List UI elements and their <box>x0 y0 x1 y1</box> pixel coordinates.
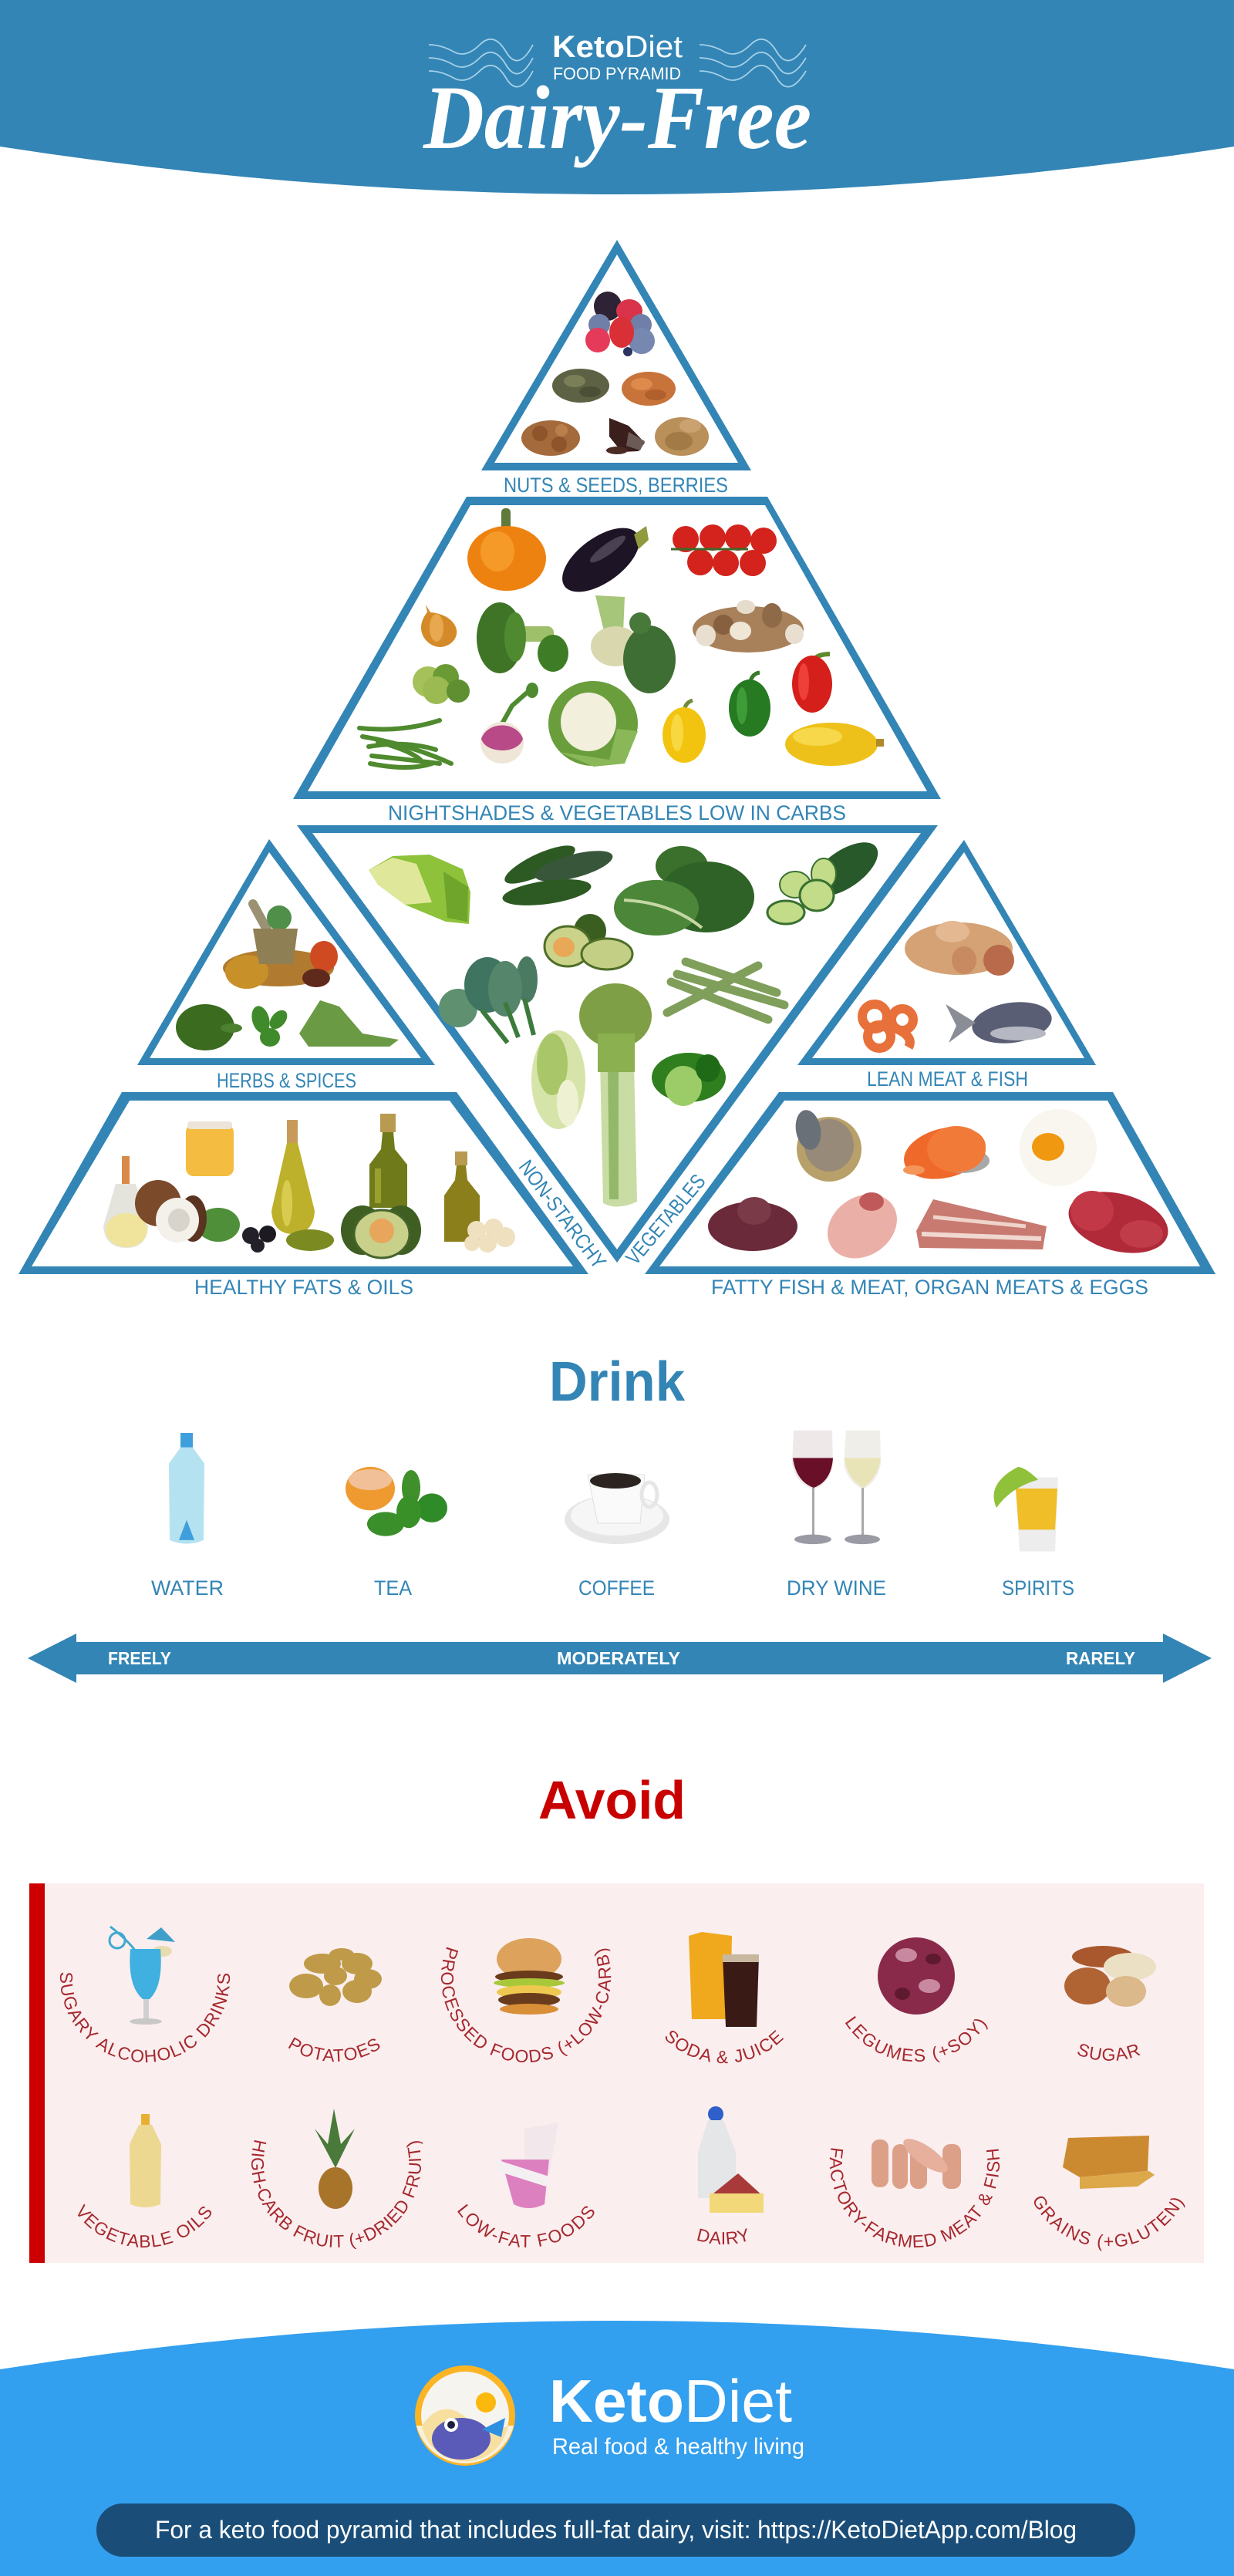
icon: pumpkin seeds <box>552 369 609 403</box>
icon: beef steak <box>1062 1182 1175 1263</box>
icon: toast <box>1063 2136 1155 2189</box>
icon: dark chocolate <box>606 418 645 454</box>
icon: avocado <box>545 914 632 969</box>
brand wordmark: KetoDiet <box>549 2367 792 2435</box>
icon: red pepper <box>792 654 832 713</box>
label: high-carb fruit: HIGH-CARB FRUIT (+DRIED FRUIT) <box>251 2139 423 2249</box>
icon: green beans <box>359 720 451 767</box>
icon: macadamia nuts <box>464 1219 515 1253</box>
icon: pork belly <box>916 1199 1047 1249</box>
icon: shrimp <box>862 1004 913 1048</box>
label: sugar: SUGAR <box>1077 2044 1141 2061</box>
icon: parsley <box>176 1004 242 1050</box>
label: potatoes: POTATOES <box>288 2038 379 2062</box>
icon: sausages <box>872 2133 961 2189</box>
label: non-starchy: NON-STARCHY <box>514 1155 611 1273</box>
subtitle: FOOD PYRAMID <box>553 64 681 83</box>
wave decoration right <box>700 39 806 87</box>
icon: basil <box>249 1004 291 1047</box>
label: tea: TEA <box>374 1576 412 1600</box>
icon: soda and juice <box>689 1932 759 2027</box>
label: nightshades: NIGHTSHADES & VEGETABLES LOW IN CARBS <box>388 801 846 824</box>
icon: pumpkin <box>467 508 546 591</box>
heading: Avoid: Avoid <box>538 1770 686 1830</box>
brand wordmark: KetoDiet <box>552 30 683 64</box>
icon: KetoDiet logo <box>415 2365 515 2466</box>
callout pill: For a keto food pyramid that includes full-fat dairy, visit: https://KetoDietApp.com/Blog <box>155 2516 1077 2544</box>
icon: almonds <box>622 372 676 406</box>
icon: brussels sprouts <box>413 664 470 704</box>
icon: broccoli <box>477 602 568 673</box>
icon: coconut <box>135 1180 240 1242</box>
icon: celery <box>579 983 652 1207</box>
icon: jar of ghee <box>186 1121 234 1176</box>
label: soda and juice: SODA & JUICE <box>665 2030 784 2064</box>
label: low-fat foods: LOW-FAT FOODS <box>457 2204 594 2247</box>
panel: non-starchy vegetables <box>297 825 938 1263</box>
icon: spinach <box>652 1053 726 1106</box>
icon: olives <box>242 1226 334 1253</box>
panel: lean meat and fish <box>797 840 1096 1065</box>
label: factory-farmed meat and fish: FACTORY-FARMED MEAT & FISH <box>830 2148 1000 2247</box>
icon: small oil bottle <box>444 1151 480 1242</box>
wave decoration left <box>429 39 533 87</box>
icon: burger <box>494 1938 565 2015</box>
icon: green pepper <box>729 673 770 737</box>
label: coffee: COFFEE <box>578 1576 655 1600</box>
icon: walnuts <box>655 417 709 456</box>
icon: collard greens <box>439 956 538 1043</box>
icon: avocado half <box>341 1205 421 1258</box>
icon: eggplant <box>551 515 650 605</box>
icon: pork chop <box>815 1181 909 1272</box>
icon: potatoes <box>289 1948 382 2006</box>
tagline: Real food & healthy living <box>552 2434 804 2460</box>
label: herbs and spices: HERBS & SPICES <box>217 1069 356 1092</box>
icon: water bottle <box>169 1433 204 1544</box>
label: moderately: MODERATELY <box>557 1648 680 1668</box>
panel: nuts, seeds and berries <box>481 240 751 470</box>
icon: spirits shot with lime <box>993 1467 1058 1552</box>
label: nuts and seeds: NUTS & SEEDS, BERRIES <box>504 474 728 497</box>
label: spirits: SPIRITS <box>1002 1576 1074 1600</box>
label: rarely: RARELY <box>1066 1648 1135 1668</box>
icon: tomatoes on the vine <box>671 524 777 576</box>
icon: yogurt <box>496 2123 558 2208</box>
icon: mortar and spices <box>223 904 338 989</box>
icon: fish <box>946 997 1054 1048</box>
icon: spaghetti squash <box>785 723 884 766</box>
icon: tea <box>346 1467 447 1536</box>
label: grains: GRAINS (+GLUTEN) <box>1033 2197 1185 2251</box>
header banner <box>0 0 1234 194</box>
icon: pineapple <box>315 2109 355 2209</box>
label: freely: FREELY <box>108 1648 171 1668</box>
icon: yellow pepper <box>663 700 706 763</box>
icon: salmon steak <box>899 1119 991 1187</box>
icon: onion <box>421 605 457 647</box>
label: fatty fish and meat: FATTY FISH & MEAT, ORGAN MEATS & EGGS <box>711 1276 1148 1299</box>
icon: liver <box>708 1197 797 1251</box>
icon: napa cabbage <box>531 1030 585 1129</box>
title: Dairy-Free <box>423 67 811 168</box>
icon: cauliflower <box>548 681 638 767</box>
panel: fatty fish, meat, organ meats, eggs <box>645 1092 1215 1274</box>
arrow: frequency scale <box>28 1634 1212 1683</box>
label: dry wine: DRY WINE <box>787 1576 886 1600</box>
icon: wine glasses <box>792 1431 881 1544</box>
panel: healthy fats and oils <box>19 1092 588 1274</box>
footer banner <box>0 2321 1234 2576</box>
label: sugary alcoholic drinks: SUGARY ALCOHOLIC DRINKS <box>60 1973 230 2062</box>
icon: coffee <box>565 1473 669 1544</box>
label: legumes: LEGUMES (+SOY) <box>845 2016 988 2062</box>
icon: oil bottle <box>369 1114 407 1208</box>
label: lean meat and fish: LEAN MEAT & FISH <box>867 1067 1028 1091</box>
icon: dill <box>299 1000 399 1047</box>
icon: romaine lettuce <box>369 855 470 924</box>
icon: asparagus <box>667 962 784 1020</box>
icon: kale <box>614 846 754 936</box>
icon: milk and cheese <box>698 2106 764 2213</box>
icon: celeriac with leaves <box>591 595 676 693</box>
icon: sardine can <box>793 1108 861 1182</box>
icon: cucumber <box>767 832 887 924</box>
icon: oil carafe <box>103 1156 148 1248</box>
icon: hazelnuts <box>521 420 580 456</box>
label: dairy: DAIRY <box>697 2228 747 2244</box>
label: healthy fats: HEALTHY FATS & OILS <box>194 1276 413 1299</box>
callout pill <box>96 2504 1135 2557</box>
icon: zucchini <box>501 838 615 910</box>
icon: mushrooms <box>693 600 804 652</box>
label: vegetables: VEGETABLES <box>622 1170 710 1269</box>
icon: turnip <box>480 683 538 764</box>
icon: fried egg <box>1020 1109 1097 1186</box>
panel: nightshades and low carb vegetables <box>293 497 941 799</box>
panel: herbs and spices <box>137 839 435 1065</box>
label: water: WATER <box>151 1576 224 1600</box>
icon: vegetable oil bottle <box>130 2114 161 2207</box>
icon: cocktail <box>110 1927 175 2025</box>
icon: olive oil carafe <box>271 1120 315 1234</box>
label: vegetable oils: VEGETABLE OILS <box>78 2203 211 2247</box>
icon: berries <box>585 292 655 356</box>
icon: kidney beans <box>878 1937 955 2015</box>
label: processed foods: PROCESSED FOODS (+LOW-CARB) <box>441 1947 611 2062</box>
icon: sugar <box>1064 1946 1156 2007</box>
icon: chicken drumsticks <box>905 921 1014 976</box>
panel: avoid foods <box>29 1883 1204 2263</box>
heading: Drink: Drink <box>549 1351 686 1413</box>
